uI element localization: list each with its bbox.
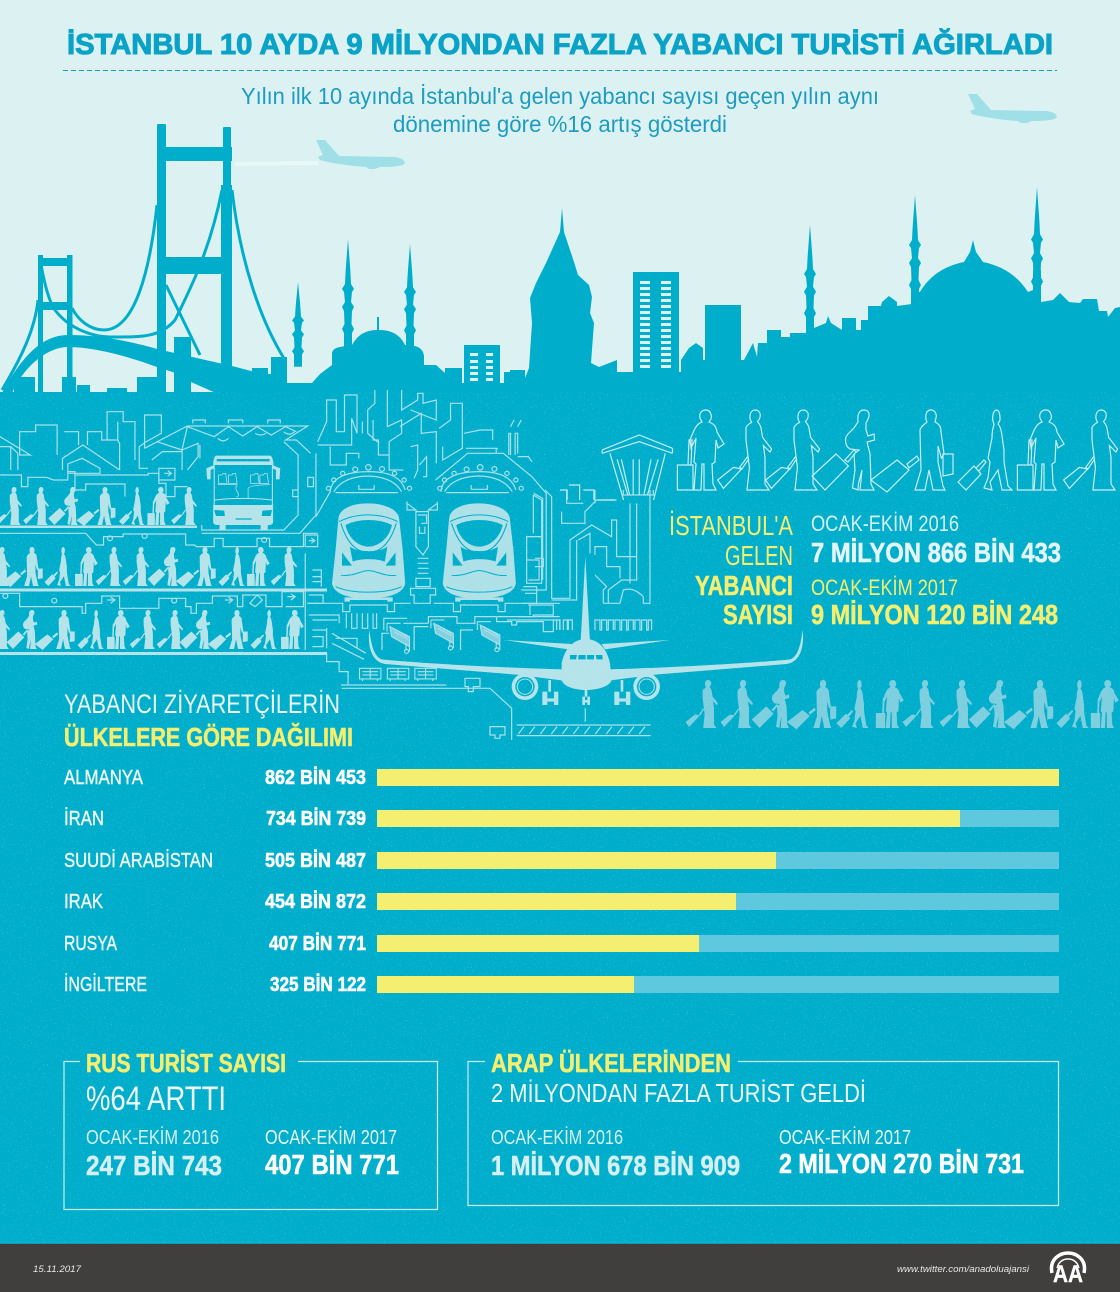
icon: airplane in sky right bbox=[968, 94, 1057, 123]
icon: airplane front view bbox=[369, 557, 803, 705]
line art: city and transport network bbox=[0, 390, 560, 685]
stat label: İstanbul'a gelen yabancı sayısı bbox=[669, 510, 793, 630]
icon: bus bbox=[206, 456, 280, 530]
line art: boarding gates and ground vehicles bbox=[359, 620, 500, 681]
panel subheading: %64 ARTTI bbox=[86, 1080, 226, 1118]
outlined large passengers bbox=[677, 410, 1118, 492]
subtitle bbox=[241, 83, 879, 137]
stat 2016: 1 MİLYON 678 BİN 909 bbox=[491, 1150, 740, 1181]
title: İSTANBUL 10 AYDA 9 MİLYONDAN FAZLA YABANCI TURİSTİ AĞIRLADI bbox=[67, 27, 1053, 61]
subtitle: Yılın ilk 10 ayında İstanbul'a gelen yabancı sayısı geçen yılın aynı bbox=[241, 83, 879, 109]
bar chart: visitors by country bbox=[64, 766, 1059, 996]
bar row: Irak: 454 BİN 872 bbox=[265, 890, 366, 913]
bar row: Suudi Arabistan bbox=[64, 849, 1059, 872]
heading: distribution by country: YABANCI ZİYARETÇİLERİN bbox=[64, 688, 340, 719]
city skyline silhouette with mosques and Galata tower bbox=[225, 187, 1120, 396]
stat 2016 bbox=[86, 1126, 222, 1181]
bar row: Suudi Arabistan: SUUDİ ARABİSTAN bbox=[64, 849, 213, 872]
stat label: İstanbul'a gelen yabancı sayısı: SAYISI bbox=[723, 599, 793, 630]
stat: Jan-Oct 2017: 9 MİLYON 120 BİN 248 bbox=[811, 599, 1058, 630]
bar row: Rusya: 407 BİN 771 bbox=[269, 932, 366, 955]
bar row: İran: İRAN bbox=[64, 807, 104, 830]
bar row: Rusya bbox=[64, 932, 1059, 955]
stat 2017 bbox=[265, 1126, 399, 1180]
bar row: İran: 734 BİN 739 bbox=[266, 807, 366, 830]
bar row: Suudi Arabistan: 505 BİN 487 bbox=[265, 849, 366, 872]
panel heading: ARAP ÜLKELERİNDEN bbox=[491, 1048, 731, 1078]
stat 2017: 2 MİLYON 270 BİN 731 bbox=[779, 1148, 1024, 1179]
panel heading: RUS TURİST SAYISI bbox=[86, 1048, 286, 1078]
stat label: İstanbul'a gelen yabancı sayısı: YABANCI bbox=[695, 570, 793, 601]
panel: Russian tourists bbox=[64, 1048, 438, 1210]
date: 15.11.2017 bbox=[33, 1264, 82, 1275]
bar row: İngiltere: İNGİLTERE bbox=[64, 973, 147, 996]
icon: high-speed train left bbox=[332, 503, 405, 602]
icon: Anadolu Agency logo: AA bbox=[1053, 1261, 1083, 1288]
stat 2017 bbox=[779, 1126, 1024, 1179]
icon: high-speed train right bbox=[443, 503, 516, 602]
icon: airplane in sky left with contrail bbox=[235, 140, 405, 169]
passenger row 2 bbox=[0, 547, 327, 592]
stat 2017: OCAK-EKİM 2017 bbox=[779, 1126, 911, 1149]
bar row: Rusya: RUSYA bbox=[64, 933, 118, 955]
bridges silhouette bbox=[2, 124, 285, 394]
source url: www.twitter.com/anadoluajansi bbox=[897, 1264, 1030, 1275]
stat: Jan-Oct 2017 bbox=[811, 575, 1058, 630]
stat 2016: OCAK-EKİM 2016 bbox=[491, 1126, 623, 1149]
stat label: İstanbul'a gelen yabancı sayısı: İSTANBUL'A bbox=[669, 510, 793, 541]
stat: Jan-Oct 2016 bbox=[811, 511, 1061, 568]
bar row: Almanya bbox=[64, 766, 1059, 789]
bar row: Irak bbox=[64, 890, 1059, 913]
bar row: Almanya: ALMANYA bbox=[64, 767, 144, 789]
bar row: İngiltere: 325 BİN 122 bbox=[270, 973, 366, 996]
bar row: Almanya: 862 BİN 453 bbox=[265, 766, 366, 789]
footer bbox=[0, 1242, 1120, 1292]
stat 2016 bbox=[491, 1126, 740, 1181]
panel subheading: 2 MİLYONDAN FAZLA TURİST GELDİ bbox=[491, 1078, 866, 1108]
bar row: İngiltere bbox=[64, 973, 1059, 996]
line art: right district and runway bbox=[342, 490, 653, 740]
subtitle: dönemine göre %16 artış gösterdi bbox=[393, 111, 727, 137]
panel: Arab tourists bbox=[468, 1048, 1058, 1206]
bar row: İran bbox=[64, 807, 1059, 830]
stat: Jan-Oct 2016: 7 MİLYON 866 BİN 433 bbox=[811, 537, 1061, 568]
bar row: Irak: IRAK bbox=[64, 891, 104, 913]
speckle texture bbox=[0, 392, 1120, 1243]
stat: Jan-Oct 2016: OCAK-EKİM 2016 bbox=[811, 511, 959, 536]
stat 2017: OCAK-EKİM 2017 bbox=[265, 1126, 397, 1149]
stat 2016: OCAK-EKİM 2016 bbox=[86, 1126, 219, 1149]
passenger row 3 bbox=[0, 610, 327, 655]
passenger row 1 bbox=[0, 487, 197, 528]
teal ground bbox=[0, 392, 1120, 1244]
heading: distribution by country: ÜLKELERE GÖRE DAĞILIMI bbox=[64, 722, 353, 752]
air traffic control tower bbox=[560, 435, 672, 500]
faded passenger row right bbox=[686, 680, 1119, 729]
stat label: İstanbul'a gelen yabancı sayısı: GELEN bbox=[725, 540, 793, 571]
icon: Anadolu Agency logo bbox=[1051, 1253, 1085, 1288]
heading: distribution by country bbox=[64, 688, 353, 752]
stat 2017: 407 BİN 771 bbox=[265, 1149, 399, 1180]
stat 2016: 247 BİN 743 bbox=[86, 1150, 222, 1181]
stat: Jan-Oct 2017: OCAK-EKİM 2017 bbox=[811, 575, 958, 600]
